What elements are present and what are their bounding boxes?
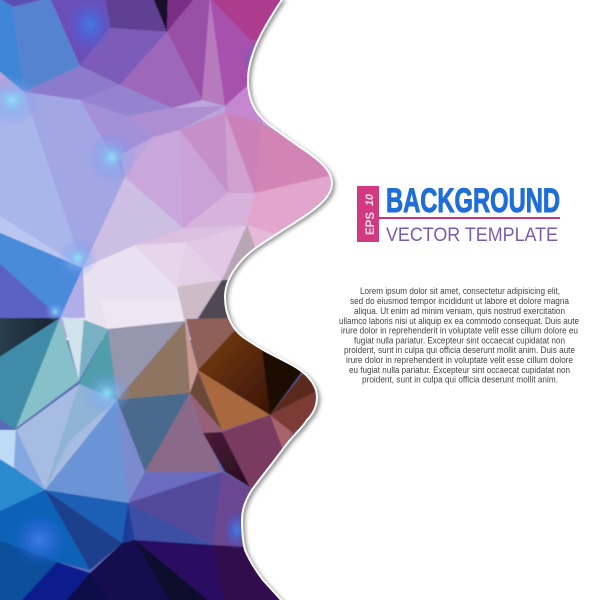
body text: fugiat nulla pariatur. Excepteur sint occaecat cupidatat non (354, 336, 565, 346)
body text: eu fugiat nulla pariatur. Excepteur sint occaecat cupidatat non (349, 365, 570, 375)
wave white outline (225, 0, 332, 600)
divider line (379, 217, 560, 219)
title block (357, 182, 560, 246)
body text: sed do eiusmod tempor incididunt ut labore et dolore magna (350, 296, 569, 306)
wave edge shadow (0, 0, 332, 600)
EPS 10 badge (357, 186, 379, 242)
top facets (0, 0, 345, 338)
body text: aliqua. Ut enim ad minim veniam, quis nostrud exercitation (354, 306, 565, 316)
body text: Lorem ipsum dolor sit amet, consectetur adipisicing elit, (360, 286, 560, 296)
body text: proident, sunt in culpa qui officia deserunt mollit anim. (362, 374, 558, 384)
body text (339, 286, 579, 384)
polygon mosaic artwork (0, 0, 345, 600)
body text: ullamco laboris nisi ut aliquip ex ea commodo consequat. Duis aute (339, 316, 579, 326)
bottom facets (0, 317, 343, 600)
body text: irure dolor in reprehenderit in voluptate velit esse cillum dolore eu (341, 326, 578, 336)
body text: proident, sunt in culpa qui officia deserunt mollit anim. Duis aute (344, 345, 575, 355)
subheading: VECTOR TEMPLATE (386, 224, 558, 246)
EPS 10 badge: 10 (364, 193, 376, 206)
lens flares (0, 0, 260, 566)
EPS 10 badge: EPS (363, 212, 377, 235)
body text: irure dolor in reprehenderit in voluptate velit esse cillum dolore (346, 355, 573, 365)
